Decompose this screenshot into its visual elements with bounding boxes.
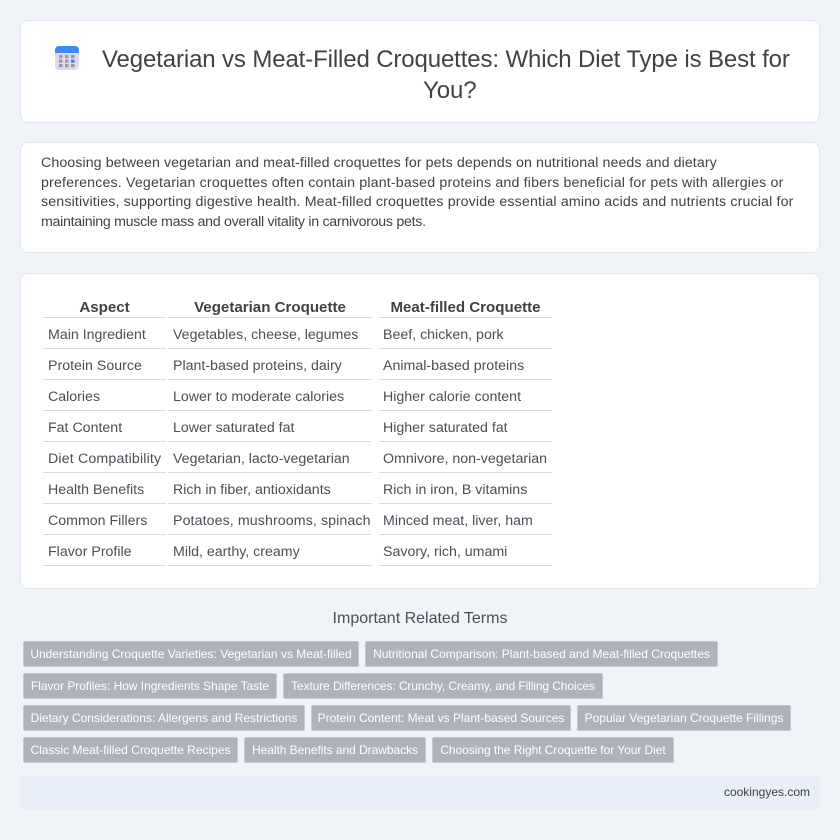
footer source: cookingyes.com xyxy=(724,785,810,799)
comparison table: Vegetables, cheese, legumes xyxy=(173,327,358,343)
comparison table: Diet Compatibility xyxy=(48,451,161,467)
comparison table panel xyxy=(20,273,820,589)
comparison table: Protein Source xyxy=(48,358,142,374)
related terms tags xyxy=(23,641,791,763)
intro paragraph: maintaining muscle mass and overall vitality in carnivorous pets. xyxy=(41,214,426,230)
related terms tags: Choosing the Right Croquette for Your Diet xyxy=(440,743,666,757)
comparison table: Lower to moderate calories xyxy=(173,389,344,405)
related terms tags: Understanding Croquette Varieties: Vegetarian vs Meat-filled xyxy=(30,647,352,661)
comparison table: Calories xyxy=(48,389,100,405)
title panel xyxy=(20,20,820,123)
comparison table: Fat Content xyxy=(48,420,122,436)
related terms heading: Important Related Terms xyxy=(333,610,507,627)
comparison table xyxy=(43,299,552,566)
title text: You? xyxy=(423,77,476,104)
intro paragraph xyxy=(41,155,794,230)
comparison table: Plant-based proteins, dairy xyxy=(173,358,342,374)
comparison table: Savory, rich, umami xyxy=(383,544,507,560)
related terms tags: Dietary Considerations: Allergens and Restrictions xyxy=(31,711,297,725)
related terms tags: Nutritional Comparison: Plant-based and Meat-filled Croquettes xyxy=(373,647,710,661)
icon: calendar xyxy=(55,46,79,70)
related terms tags: Health Benefits and Drawbacks xyxy=(252,743,418,757)
comparison table: Vegetarian Croquette xyxy=(194,299,346,316)
comparison table: Potatoes, mushrooms, spinach xyxy=(173,513,371,529)
comparison table: Higher calorie content xyxy=(383,389,521,405)
comparison table: Rich in fiber, antioxidants xyxy=(173,482,331,498)
comparison table: Minced meat, liver, ham xyxy=(383,513,533,529)
footer bar xyxy=(20,776,820,810)
intro paragraph: Choosing between vegetarian and meat-filled croquettes for pets depends on nutritional needs and dietary xyxy=(41,155,717,171)
title text: Vegetarian vs Meat-Filled Croquettes: Which Diet Type is Best for xyxy=(102,46,790,73)
intro text panel xyxy=(20,142,820,253)
comparison table: Beef, chicken, pork xyxy=(383,327,504,343)
title text xyxy=(102,46,790,104)
comparison table: Higher saturated fat xyxy=(383,420,508,436)
related terms tags: Classic Meat-filled Croquette Recipes xyxy=(30,743,231,757)
comparison table: Flavor Profile xyxy=(48,544,132,560)
comparison table: Omnivore, non-vegetarian xyxy=(383,451,547,467)
comparison table: Common Fillers xyxy=(48,513,147,529)
comparison table: Rich in iron, B vitamins xyxy=(383,482,527,498)
comparison table: Mild, earthy, creamy xyxy=(173,544,300,560)
comparison table: Lower saturated fat xyxy=(173,420,294,436)
comparison table: Vegetarian, lacto-vegetarian xyxy=(173,451,350,467)
comparison table: Animal-based proteins xyxy=(383,358,524,374)
related terms tags: Texture Differences: Crunchy, Creamy, and Filling Choices xyxy=(291,679,595,693)
comparison table: Aspect xyxy=(79,299,130,316)
comparison table: Meat-filled Croquette xyxy=(390,299,541,316)
comparison table: Main Ingredient xyxy=(48,327,146,343)
related terms tags: Protein Content: Meat vs Plant-based Sources xyxy=(318,711,564,725)
intro paragraph: sensitivities, supporting digestive health. Meat-filled croquettes provide essential amino acids and nutrients crucial for xyxy=(41,194,794,210)
related terms tags: Flavor Profiles: How Ingredients Shape Taste xyxy=(31,679,269,693)
intro paragraph: preferences. Vegetarian croquettes often contain plant-based proteins and fibers beneficial for pets with allergies or xyxy=(41,174,783,190)
related terms tags: Popular Vegetarian Croquette Fillings xyxy=(585,711,783,725)
comparison table: Health Benefits xyxy=(48,482,144,498)
